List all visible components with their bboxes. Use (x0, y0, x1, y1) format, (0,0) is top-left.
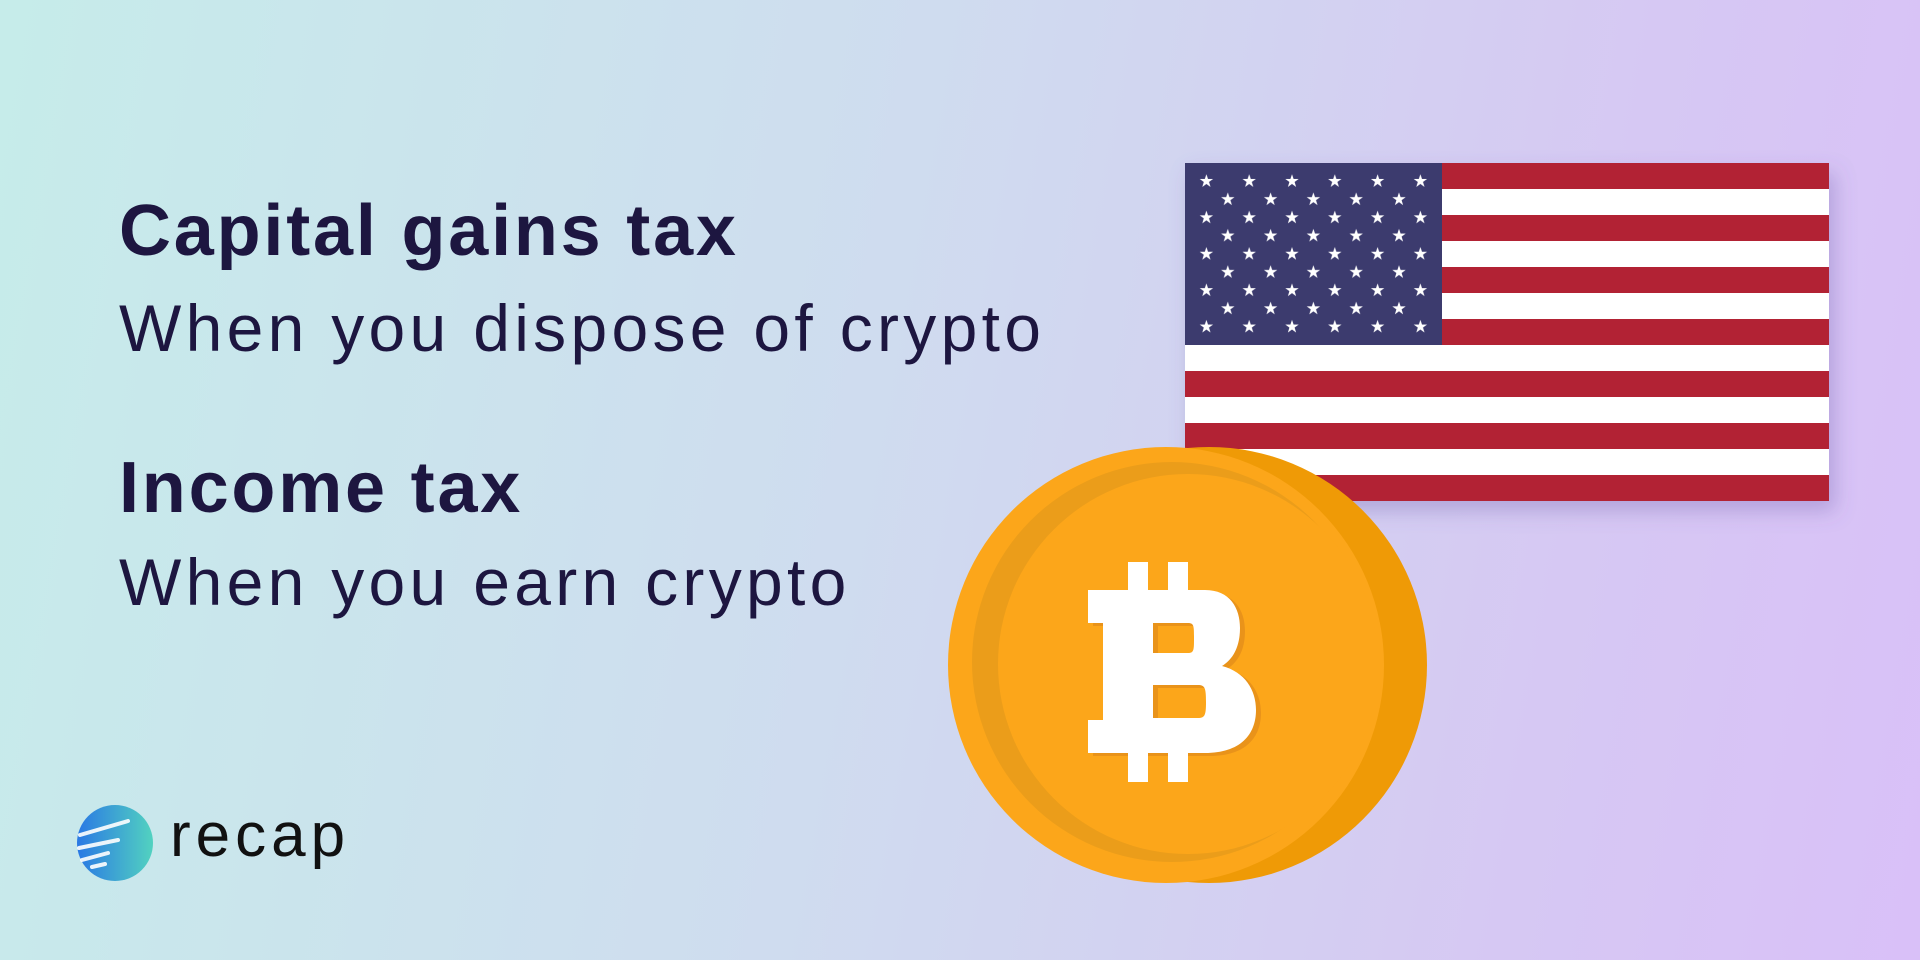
icon: US flag (1185, 163, 1829, 501)
heading: income tax: Income tax (119, 448, 523, 528)
heading: capital gains tax: Capital gains tax (119, 191, 739, 271)
text: when you dispose of crypto: When you dispose of crypto (119, 291, 1045, 365)
logo: recap (77, 801, 350, 881)
logo: recap: recap (170, 801, 350, 870)
icon: bitcoin coin (948, 447, 1427, 883)
text: when you earn crypto: When you earn crypto (119, 545, 851, 619)
